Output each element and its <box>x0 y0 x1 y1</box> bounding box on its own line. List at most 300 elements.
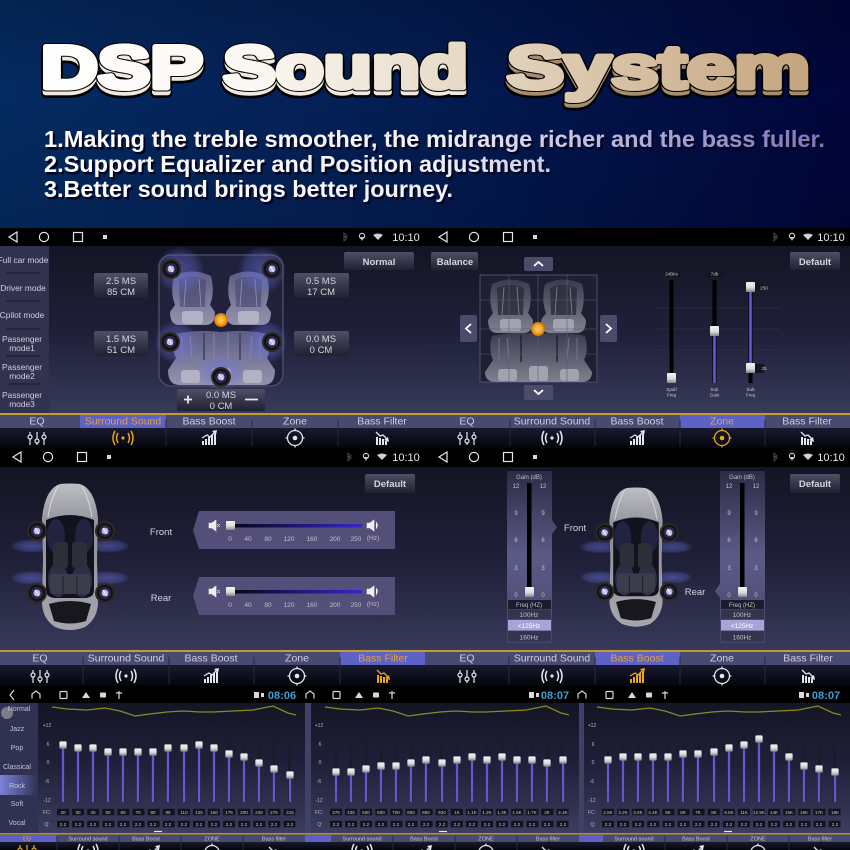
frequency and Q values: 920 <box>438 810 446 815</box>
frequency and Q values: 17K <box>815 810 824 815</box>
delay button: rear right: 0.0 MS <box>306 334 336 345</box>
scale labels: -6 <box>45 779 49 785</box>
frequency and Q values: 2.2 <box>469 822 476 827</box>
tab bar: Bass Boost <box>682 836 710 842</box>
frequency and Q values: 8K <box>711 810 718 815</box>
frequency and Q values: 2.2 <box>620 822 627 827</box>
scale labels: +12 <box>315 723 323 729</box>
rear filter slider <box>193 577 395 615</box>
tab bar: Bass Filter <box>783 652 833 664</box>
scale labels: FC: <box>588 810 596 816</box>
scale labels <box>315 723 323 828</box>
frequency and Q values: 15K <box>785 810 794 815</box>
sidebar modes: mode3 <box>9 399 35 409</box>
rear gain column: 160Hz <box>733 634 751 642</box>
frequency and Q values <box>330 810 570 827</box>
scale labels: -6 <box>317 779 321 785</box>
balance button <box>431 252 478 270</box>
front filter slider <box>193 511 395 549</box>
delay button: front left <box>94 273 148 298</box>
preset sidebar: Rock <box>9 783 25 790</box>
front filter slider: 200 <box>330 536 341 543</box>
feature line 1: 1.Making the treble smoother, the midrange richer and the bass fuller. <box>46 128 827 154</box>
tab bar: Surround Sound <box>88 652 164 664</box>
balance button: Balance <box>437 257 473 268</box>
delay button: rear left <box>94 331 148 356</box>
scale labels: +12 <box>588 723 596 729</box>
preset sidebar: Normal <box>8 706 31 713</box>
tab bar <box>425 413 850 448</box>
frequency and Q values: 2K <box>544 810 551 815</box>
frequency and Q values: 2.2 <box>211 822 218 827</box>
zone sliders: Spdif <box>666 387 677 392</box>
equalizer sliders <box>59 741 295 802</box>
delay button: rear right: 0 CM <box>310 345 332 356</box>
frequency and Q values: 125 <box>195 810 203 815</box>
frequency and Q values: 30 <box>75 810 81 815</box>
rear gain column: 6 <box>727 538 731 544</box>
frequency and Q values: 16K <box>800 810 809 815</box>
tab bar: Bass filter <box>536 836 560 842</box>
frequency and Q values: 2.2 <box>439 822 446 827</box>
delay button: rear left: 51 CM <box>107 345 135 356</box>
frequency and Q values: 2.2 <box>635 822 642 827</box>
status bar: 08:07 <box>812 690 840 702</box>
frequency and Q values: 2.2 <box>196 822 203 827</box>
scale labels: -12 <box>315 798 323 804</box>
front filter slider: 250 <box>351 536 362 543</box>
tab bar: Bass Filter <box>357 416 407 428</box>
tab bar: Zone <box>285 652 309 664</box>
sidebar modes: Cpilot mode <box>0 310 45 320</box>
feature line 2: 2.Support Equalizer and Position adjustment. <box>44 151 551 177</box>
tab bar: Bass Boost <box>610 416 664 428</box>
frequency and Q values: 2.2 <box>378 822 385 827</box>
rear gain column: 0 <box>754 593 758 599</box>
rear gain column: 12 <box>726 484 733 490</box>
frequency and Q values <box>602 810 842 827</box>
panel: EQ screen mid bands <box>305 686 580 850</box>
scale labels: -12 <box>588 798 596 804</box>
frequency and Q values: 2.2 <box>181 822 188 827</box>
front gain column: 0 <box>514 593 518 599</box>
tab bar: Surround Sound <box>85 416 161 428</box>
frequency and Q values: 435 <box>347 810 355 815</box>
tab bar: Zone <box>710 416 734 428</box>
panel: surround sound screen <box>0 228 425 448</box>
car with speakers <box>579 488 693 627</box>
feature line 2: 2.Support Equalizer and Position adjustment. <box>46 154 553 180</box>
scale labels: FC: <box>315 810 323 816</box>
stepper <box>177 389 265 412</box>
tab bar: Bass Filter <box>782 416 832 428</box>
frequency and Q values: 95 <box>165 810 171 815</box>
tab bar: Surround sound <box>342 836 382 842</box>
frequency and Q values: 2.2 <box>726 822 733 827</box>
frequency and Q values: 2.2 <box>241 822 248 827</box>
tab bar: EQ <box>459 652 475 664</box>
scale labels: Q: <box>317 822 323 828</box>
stepper: 0.0 MS <box>206 390 236 401</box>
frequency and Q values: 2.2 <box>560 822 567 827</box>
title: System: System <box>507 34 810 101</box>
arrow: right <box>600 315 617 342</box>
frequency and Q values: 2.2 <box>695 822 702 827</box>
arrow: left <box>460 315 477 342</box>
frequency and Q values: 14K <box>770 810 779 815</box>
frequency and Q values: 2.2 <box>454 822 461 827</box>
zone sliders <box>655 271 780 398</box>
feature line 1: 1.Making the treble smoother, the midrange richer and the bass fuller. <box>44 126 825 152</box>
frequency and Q values: 2.2 <box>499 822 506 827</box>
rear filter slider: 80 <box>264 602 272 609</box>
tab bar: Bass Boost <box>182 416 236 428</box>
front filter slider: 40 <box>244 536 252 543</box>
arrow: up <box>524 257 553 271</box>
delay button: front right: 0.5 MS <box>306 276 336 287</box>
frequency and Q values <box>57 810 297 827</box>
frequency and Q values: 2.2 <box>605 822 612 827</box>
delay button: front right <box>294 273 349 298</box>
status bar: 10:10 <box>817 452 845 464</box>
frequency and Q values: 2.2 <box>348 822 355 827</box>
frequency and Q values: 1K <box>454 810 461 815</box>
frequency and Q values: 700 <box>392 810 400 815</box>
scale labels <box>588 723 596 828</box>
panel: bass boost screen <box>425 448 850 686</box>
front gain column: <125Hz <box>518 623 540 630</box>
default button: Default <box>374 479 407 490</box>
scale labels: FC: <box>43 810 51 816</box>
frequency and Q values: 800 <box>407 810 415 815</box>
frequency and Q values: 275 <box>270 810 278 815</box>
status bar: 08:06 <box>268 690 296 702</box>
scale labels: 6 <box>319 742 322 748</box>
response curve <box>597 706 841 716</box>
arrow: down <box>524 385 553 400</box>
zone sliders: Sub <box>710 387 719 392</box>
frequency and Q values: 11K <box>740 810 749 815</box>
front gain column: 3 <box>514 566 518 572</box>
frequency and Q values: 2.2 <box>484 822 491 827</box>
panel: bass filter screen <box>0 448 425 686</box>
tab bar <box>0 650 425 686</box>
scale labels: 6 <box>47 742 50 748</box>
tab bar: Bass Boost <box>184 652 238 664</box>
rear gain column: 6 <box>754 538 758 544</box>
tab bar: Surround Sound <box>514 652 590 664</box>
front gain column: 3 <box>541 566 545 572</box>
scale labels <box>43 723 51 828</box>
tab bar: Bass Filter <box>358 652 408 664</box>
title: DSP Sound: DSP Sound <box>41 34 468 101</box>
frequency and Q values: 2.2 <box>60 822 67 827</box>
tab bar: EQ <box>459 416 475 428</box>
frequency and Q values: 2.2 <box>165 822 172 827</box>
status bar: 10:10 <box>392 232 420 244</box>
delay button: front left: 2.5 MS <box>106 276 136 287</box>
sidebar modes: mode1 <box>9 343 35 353</box>
sidebar modes <box>0 246 49 413</box>
title: System: System <box>507 40 810 107</box>
feature line 3: 3.Better sound brings better journey. <box>46 178 455 204</box>
frequency and Q values: 2.2 <box>271 822 278 827</box>
delay button: rear left: 1.5 MS <box>106 334 136 345</box>
delay button: rear right <box>294 331 349 356</box>
tab bar: Bass Boost <box>610 652 664 664</box>
zone sliders: Gain <box>710 392 720 398</box>
title: DSP Sound <box>41 34 468 107</box>
frequency and Q values: 2.8K <box>603 810 614 815</box>
sidebar modes: Passenger <box>2 334 42 344</box>
rear gain column <box>715 471 765 643</box>
tab bar: Bass Boost <box>132 836 160 842</box>
frequency and Q values: 2.2 <box>287 822 294 827</box>
frequency and Q values: 2.2 <box>393 822 400 827</box>
frequency and Q values: 20 <box>60 810 66 815</box>
front gain column: 12 <box>540 484 547 490</box>
frequency and Q values: 2.2 <box>514 822 521 827</box>
frequency and Q values: 60 <box>120 810 126 815</box>
frequency and Q values: 12.5K <box>753 810 766 815</box>
panel: zone screen <box>425 228 850 448</box>
title: DSP Sound: DSP Sound <box>41 40 468 107</box>
frequency and Q values: 2.2 <box>741 822 748 827</box>
page dots <box>439 830 447 832</box>
scale labels: 0 <box>319 760 322 766</box>
frequency and Q values: 150 <box>210 810 218 815</box>
frequency and Q values: 2.2 <box>680 822 687 827</box>
tab bar: Surround Sound <box>514 416 590 428</box>
frequency and Q values: 2.2 <box>544 822 551 827</box>
preset sidebar: Soft <box>11 801 23 808</box>
frequency and Q values: 375 <box>332 810 340 815</box>
tab bar: EQ <box>32 652 48 664</box>
front gain column: 100Hz <box>520 612 538 619</box>
frequency and Q values: 2.2 <box>408 822 415 827</box>
status bar: 10:10 <box>817 232 845 244</box>
equalizer sliders <box>332 753 568 802</box>
frequency and Q values: 2.2 <box>756 822 763 827</box>
tab bar: Surround sound <box>68 836 108 842</box>
panel: EQ screen high bands <box>578 686 850 850</box>
frequency and Q values: 1.5K <box>512 810 523 815</box>
rear filter slider: 120 <box>284 602 295 609</box>
scale labels: -6 <box>590 779 594 785</box>
normal button: Normal <box>363 257 395 268</box>
scale labels: Q: <box>44 822 50 828</box>
frequency and Q values: 1.7K <box>527 810 538 815</box>
car with speakers <box>10 484 130 630</box>
preset sidebar: Pop <box>11 745 23 752</box>
label: front: Front <box>150 527 172 538</box>
delay button: front right: 17 CM <box>307 287 335 298</box>
frequency and Q values: 40 <box>90 810 96 815</box>
zone sliders: 25 <box>761 366 767 371</box>
frequency and Q values: 2.2 <box>529 822 536 827</box>
zone sliders: 7db <box>711 272 719 276</box>
frequency and Q values: 1.2K <box>482 810 493 815</box>
page dots <box>724 830 732 832</box>
status bar: 08:07 <box>541 690 569 702</box>
feature line 3: 3.Better sound brings better journey. <box>44 176 453 202</box>
front gain column: 0 <box>541 593 545 599</box>
frequency and Q values: 7K <box>695 810 702 815</box>
frequency and Q values: 2.4K <box>558 810 569 815</box>
front filter slider: 80 <box>264 536 272 543</box>
default button: Default <box>799 479 832 490</box>
rear filter slider: 0 <box>228 602 232 609</box>
tab bar: EQ <box>29 416 45 428</box>
frequency and Q values: 2.2 <box>363 822 370 827</box>
frequency and Q values: 2.2 <box>90 822 97 827</box>
rear filter slider: (Hz) <box>367 601 379 608</box>
rear gain column: Gain (dB) <box>729 475 755 481</box>
zone seat grid <box>480 275 597 382</box>
tab bar <box>0 413 425 448</box>
zone sliders: Freq <box>667 392 677 398</box>
frequency and Q values: 2.2 <box>105 822 112 827</box>
tab bar: Bass Boost <box>410 836 438 842</box>
sidebar modes: Driver mode <box>0 283 46 293</box>
sidebar modes: Passenger <box>2 362 42 372</box>
rear filter slider: 40 <box>244 602 252 609</box>
rear gain column: 12 <box>753 484 760 490</box>
rear gain column: 3 <box>754 566 758 572</box>
scale labels: 0 <box>592 760 595 766</box>
frequency and Q values: 2.2 <box>120 822 127 827</box>
title <box>41 34 810 107</box>
tab bar: Bass filter <box>262 836 286 842</box>
response curve <box>52 706 296 716</box>
rear gain column: 100Hz <box>733 612 751 619</box>
default button <box>790 474 840 493</box>
frequency and Q values: 3.2K <box>618 810 629 815</box>
scale labels: 0 <box>47 760 50 766</box>
response curve <box>325 706 569 716</box>
front gain column: 12 <box>513 484 520 490</box>
preset sidebar <box>0 703 38 833</box>
front gain column: 9 <box>514 511 518 517</box>
label: front: Front <box>564 523 586 534</box>
scale labels: -12 <box>43 798 51 804</box>
status bar <box>578 690 840 702</box>
preset sidebar: Classical <box>3 764 31 771</box>
feature list <box>44 126 827 204</box>
rear gain column: Freq (HZ) <box>729 603 755 609</box>
front gain column <box>507 471 557 643</box>
frequency and Q values: 80 <box>150 810 156 815</box>
frequency and Q values: 2.2 <box>816 822 823 827</box>
front gain column: 6 <box>514 538 518 544</box>
title: DSP Sound: DSP Sound <box>41 38 468 106</box>
front gain column: 6 <box>541 538 545 544</box>
equalizer sliders <box>604 735 840 802</box>
title: System <box>507 34 810 107</box>
frequency and Q values: 860 <box>422 810 430 815</box>
frequency and Q values: 2.2 <box>226 822 233 827</box>
frequency and Q values: 2.2 <box>333 822 340 827</box>
status bar <box>10 690 296 702</box>
default button: Default <box>799 257 832 268</box>
rear gain column: <125Hz <box>731 623 753 630</box>
frequency and Q values: 50 <box>105 810 111 815</box>
status bar: 10:10 <box>392 452 420 464</box>
label: rear: Rear <box>151 593 171 604</box>
front filter slider: 160 <box>307 536 318 543</box>
status bar <box>439 232 845 244</box>
frequency and Q values: 4.4K <box>648 810 659 815</box>
frequency and Q values: 600 <box>377 810 385 815</box>
rear gain column: 9 <box>754 511 758 517</box>
rear filter slider: 250 <box>351 602 362 609</box>
rear gain column: 0 <box>727 593 731 599</box>
front filter slider: (Hz) <box>367 535 379 542</box>
frequency and Q values: 6K <box>680 810 687 815</box>
preset sidebar: Vocal <box>8 820 26 827</box>
scale labels: +12 <box>43 723 51 729</box>
zone sliders: Freq <box>746 392 756 398</box>
frequency and Q values: 500 <box>362 810 370 815</box>
sidebar modes: Passenger <box>2 390 42 400</box>
status bar <box>306 690 569 702</box>
zone sliders: 250 <box>760 286 768 290</box>
tab bar: Surround sound <box>614 836 654 842</box>
header background <box>0 0 850 228</box>
frequency and Q values: 1.1K <box>467 810 478 815</box>
frequency and Q values: 175 <box>225 810 233 815</box>
frequency and Q values: 2.2 <box>423 822 430 827</box>
tab bar: ZONE <box>478 836 494 842</box>
tab bar <box>0 833 305 850</box>
rear gain column: 3 <box>727 566 731 572</box>
tab bar: Zone <box>710 652 734 664</box>
frequency and Q values: 235 <box>255 810 263 815</box>
frequency and Q values: 9.5K <box>724 810 735 815</box>
title: System: System <box>507 38 810 106</box>
frequency and Q values: 1.3K <box>497 810 508 815</box>
tab bar: Zone <box>283 416 307 428</box>
frequency and Q values: 2.2 <box>801 822 808 827</box>
zone sliders: Sub <box>746 387 755 392</box>
page dots <box>154 830 162 832</box>
tab bar <box>305 833 580 850</box>
frequency and Q values: 5K <box>665 810 672 815</box>
frequency and Q values: 200 <box>240 810 248 815</box>
frequency and Q values: 2.2 <box>256 822 263 827</box>
frequency and Q values: 2.2 <box>665 822 672 827</box>
tab bar: ZONE <box>750 836 766 842</box>
frequency and Q values: 2.2 <box>650 822 657 827</box>
tab bar: ZONE <box>204 836 220 842</box>
status bar <box>13 452 420 464</box>
sidebar modes: mode2 <box>9 371 35 381</box>
stepper: 0 CM <box>210 401 232 412</box>
label: rear: Rear <box>685 587 705 598</box>
title: DSP Sound: DSP Sound <box>41 34 468 101</box>
frequency and Q values: 315 <box>286 810 294 815</box>
frequency and Q values: 2.2 <box>135 822 142 827</box>
rear filter slider: 160 <box>307 602 318 609</box>
tab bar <box>579 833 850 850</box>
front gain column: Gain (dB) <box>516 475 542 481</box>
frequency and Q values: 70 <box>135 810 141 815</box>
default button <box>790 252 840 270</box>
normal button <box>344 252 414 270</box>
status bar <box>9 232 420 244</box>
frequency and Q values: 3.6K <box>633 810 644 815</box>
frequency and Q values: 18K <box>831 810 840 815</box>
